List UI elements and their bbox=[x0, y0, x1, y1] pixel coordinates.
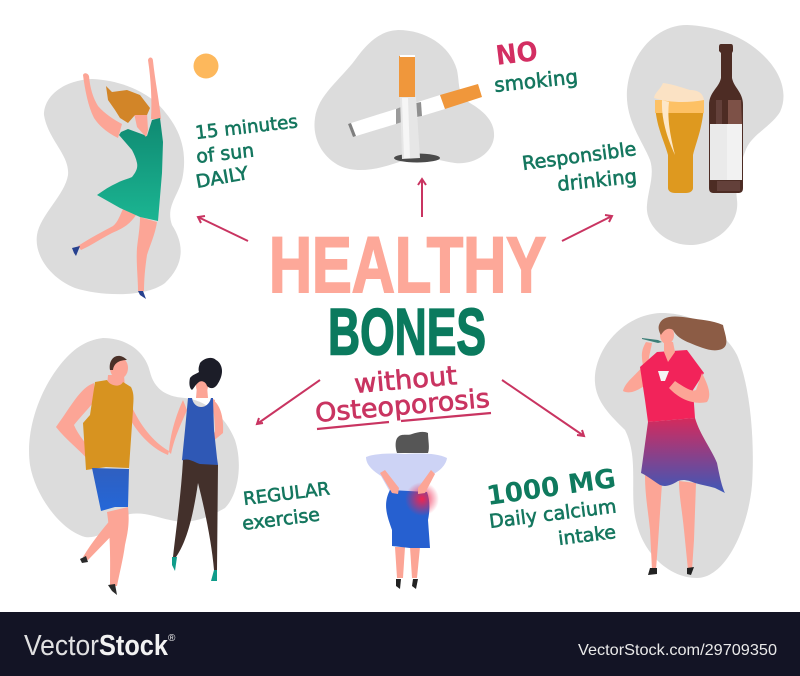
title bbox=[269, 220, 546, 429]
text: calcium intake: intake bbox=[557, 522, 617, 550]
logo: VectorStock: Vector bbox=[24, 630, 99, 662]
logo: VectorStock bbox=[24, 630, 176, 662]
panel: sun bbox=[37, 54, 299, 299]
text: responsible drinking bbox=[521, 138, 638, 196]
text: regular exercise: REGULAR bbox=[242, 479, 331, 510]
logo: VectorStock: ® bbox=[168, 633, 176, 644]
text: responsible drinking: Responsible bbox=[521, 138, 638, 175]
heading: bones: BONES bbox=[328, 294, 486, 368]
panel: responsible drinking bbox=[521, 25, 784, 245]
arrow: to smoking bbox=[418, 179, 426, 217]
footer bar bbox=[0, 612, 800, 676]
text: image id: VectorStock.com/29709350 bbox=[578, 642, 777, 659]
figure: woman bbox=[169, 358, 223, 581]
arrow: to sun bbox=[198, 216, 248, 241]
figure: woman with back pain bbox=[366, 432, 447, 589]
gray blob: exercise bbox=[29, 338, 239, 537]
icon: wine bottle bbox=[709, 44, 743, 193]
gray blob: smoking bbox=[314, 30, 494, 170]
gray blob: sun bbox=[37, 79, 184, 294]
text: regular exercise bbox=[241, 479, 331, 535]
text: no: NO bbox=[494, 36, 540, 72]
text: smoking: smoking bbox=[493, 65, 579, 97]
arrow: to exercise bbox=[257, 380, 320, 424]
arrow: to calcium bbox=[502, 380, 584, 436]
panel: calcium intake bbox=[485, 313, 753, 578]
text: calcium intake bbox=[485, 463, 618, 550]
text: 15 minutes of sun daily: DAILY bbox=[194, 163, 251, 193]
icon: sun bbox=[194, 54, 218, 78]
arrows bbox=[198, 179, 612, 436]
subheading: without osteoporosis bbox=[314, 361, 491, 429]
figure: dancing woman bbox=[72, 57, 163, 299]
gray blob: calcium bbox=[595, 313, 753, 578]
text: 15 minutes of sun daily bbox=[194, 111, 299, 193]
text: calcium intake: Daily calcium bbox=[488, 496, 618, 533]
panel: regular exercise bbox=[29, 338, 331, 595]
text: 15 minutes of sun daily: of sun bbox=[195, 140, 255, 168]
subheading: without osteoporosis: without bbox=[353, 361, 458, 400]
gray blob: drinking bbox=[627, 25, 784, 245]
text: calcium intake: 1000 MG bbox=[485, 463, 618, 512]
subheading: without osteoporosis: Osteoporosis bbox=[314, 384, 491, 429]
icon: beer glass bbox=[654, 83, 704, 193]
text: responsible drinking: drinking bbox=[556, 165, 638, 196]
logo: VectorStock: Stock bbox=[99, 630, 169, 662]
figure: woman eating bbox=[623, 316, 726, 575]
text: regular exercise: exercise bbox=[241, 505, 321, 535]
figure: man bbox=[56, 356, 169, 595]
heading: healthy: HEALTHY bbox=[269, 220, 546, 309]
text: 15 minutes of sun daily: 15 minutes bbox=[194, 111, 299, 144]
panel: no smoking bbox=[314, 30, 579, 170]
arrow: to drinking bbox=[562, 215, 612, 241]
icon: crossed cigarettes bbox=[348, 55, 482, 162]
